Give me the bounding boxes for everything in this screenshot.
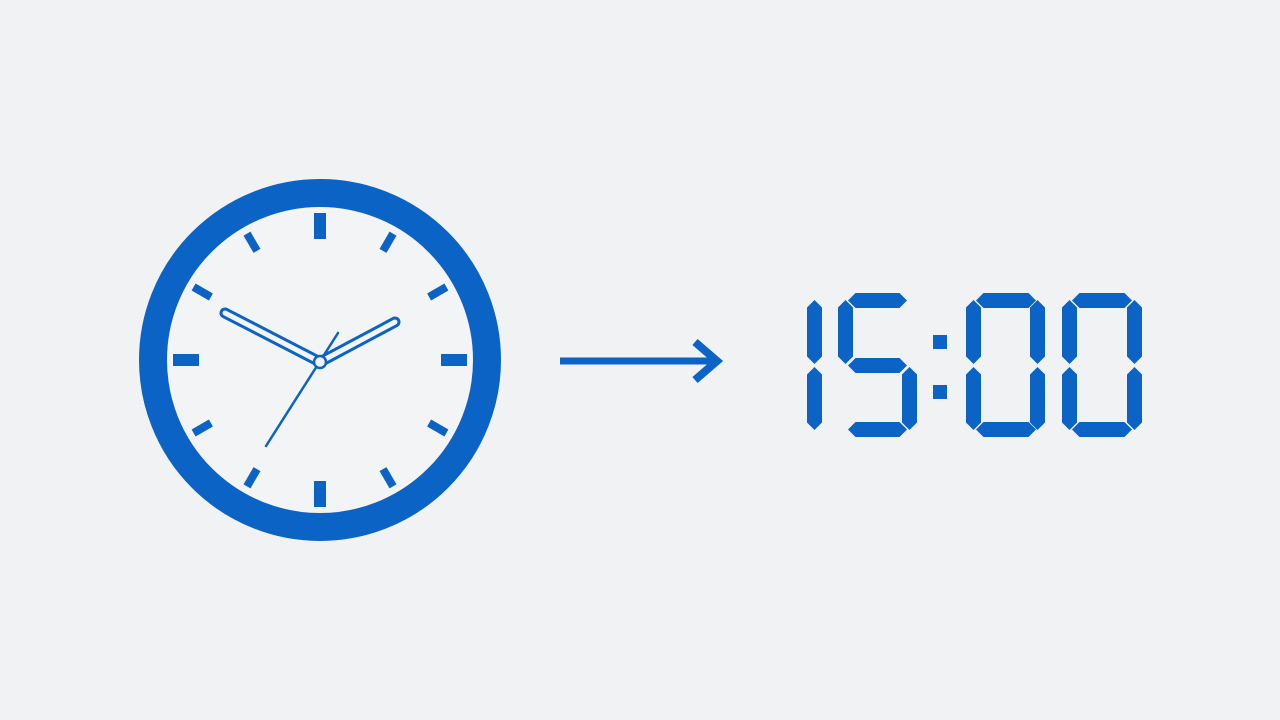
clock hands bbox=[225, 313, 395, 446]
colon bbox=[933, 335, 947, 349]
clock face ring bbox=[153, 193, 487, 527]
arrow bbox=[560, 342, 717, 380]
digit 1 bbox=[807, 300, 822, 364]
digit 0 bbox=[966, 300, 981, 364]
digital time display: 15:00: 15:00 bbox=[750, 306, 1200, 476]
hour ticks bbox=[173, 213, 467, 507]
icon: analog clock bbox=[153, 193, 487, 527]
digit 5 bbox=[838, 300, 853, 364]
digit 0 second bbox=[1062, 300, 1077, 364]
